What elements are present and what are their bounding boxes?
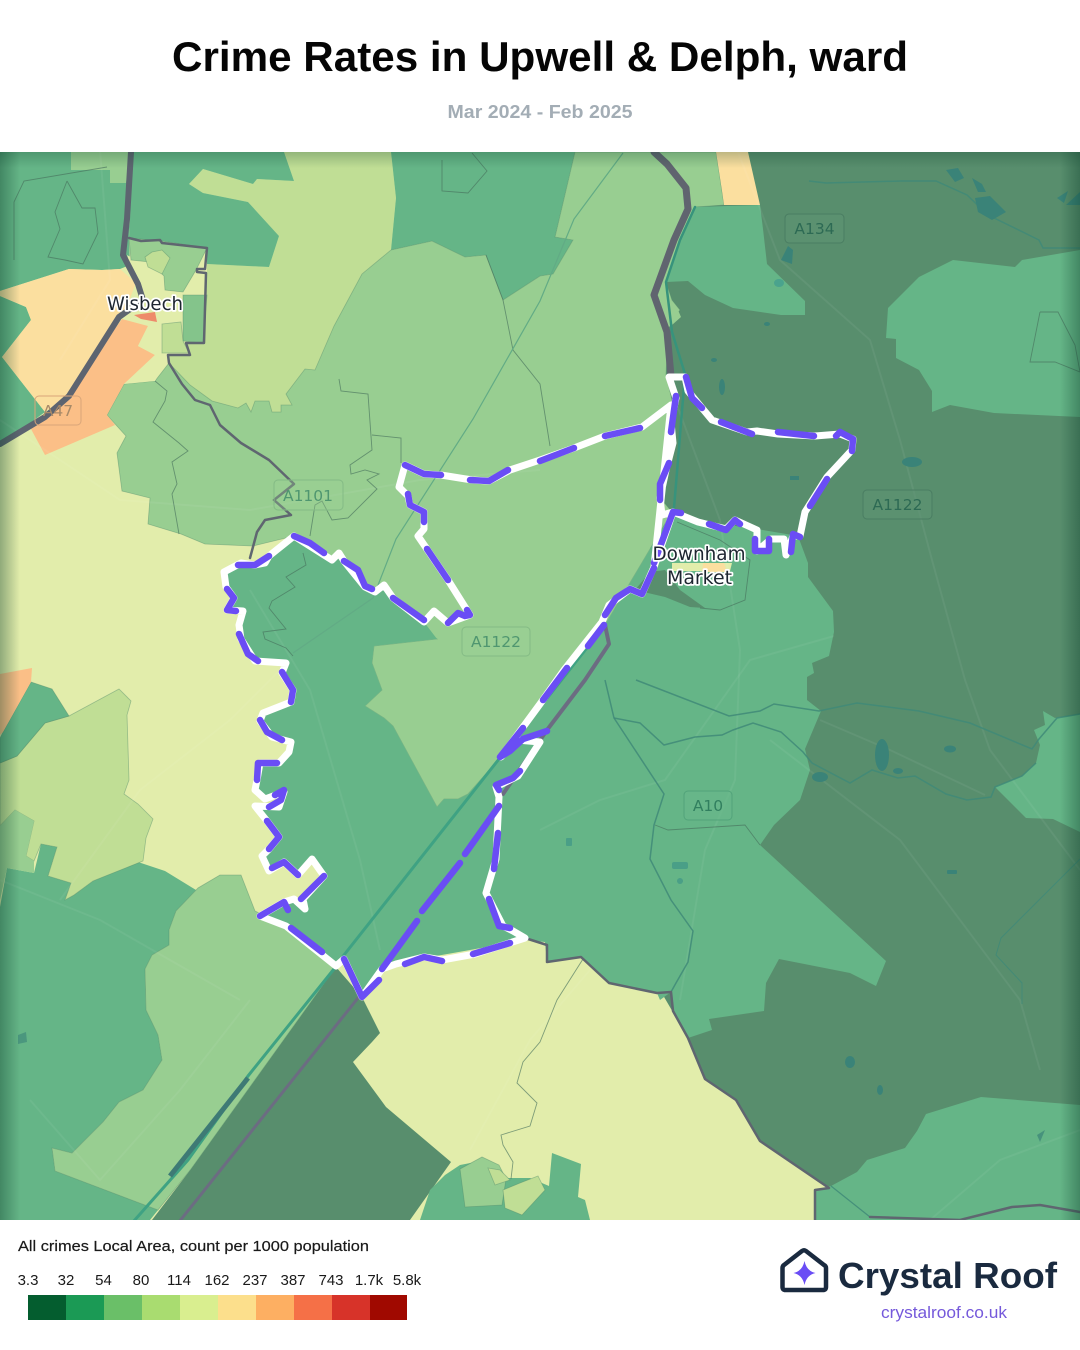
- legend scale values: [18, 1272, 422, 1289]
- website url: crystalroof.co.uk: [881, 1304, 1008, 1322]
- railway and main roads: [0, 152, 1080, 1222]
- road label: A1122 centre: A1122: [471, 633, 521, 651]
- road label: A134: A134: [794, 220, 835, 238]
- road label: A1101: [274, 480, 343, 510]
- road label: A1122 east: [863, 490, 932, 519]
- road label: A1122 east: A1122: [872, 496, 923, 514]
- map panel: [0, 150, 1080, 1222]
- legend scale values: 743: [318, 1272, 344, 1289]
- legend scale values: 80: [133, 1272, 149, 1289]
- road label: A47: A47: [43, 402, 73, 420]
- thin diagonal disused railway: [293, 153, 623, 653]
- district boundary Wisbech: [129, 238, 294, 558]
- place label: Wisbech: Wisbech: [107, 293, 183, 315]
- legend colour bar: [28, 1295, 407, 1320]
- place label: Downham Market: Market: [667, 567, 732, 589]
- icon: house with star: [782, 1250, 826, 1290]
- railway line: [179, 998, 358, 1222]
- road label: A1122 centre: [462, 627, 530, 656]
- logo: Crystal Roof: [782, 1250, 1058, 1322]
- map edge vignette: [0, 152, 1080, 1220]
- thin ward boundaries: [14, 153, 1080, 1179]
- legend scale values: 32: [58, 1272, 74, 1289]
- teal waterway along the railway: [133, 625, 605, 1222]
- legend scale values: 237: [242, 1272, 268, 1289]
- legend scale values: 3.3: [18, 1272, 38, 1289]
- legend scale values: 162: [204, 1272, 230, 1289]
- place label: Downham Market: Downham: [652, 543, 746, 565]
- legend scale values: 5.8k: [393, 1272, 422, 1289]
- logo wordmark: Crystal Roof: [838, 1255, 1058, 1296]
- legend scale values: 1.7k: [355, 1272, 384, 1289]
- legend: [18, 1238, 422, 1320]
- place label: Downham Market: [652, 543, 746, 589]
- legend scale values: 114: [167, 1272, 191, 1289]
- water: rivers and lakes: [605, 181, 1080, 1217]
- legend scale values: 54: [95, 1272, 112, 1289]
- legend title: All crimes Local Area, count per 1000 population: [18, 1238, 369, 1255]
- faint road network: [678, 208, 1066, 1070]
- ward boundary: Upwell and Delph: [224, 377, 853, 997]
- subtitle: date range: Mar 2024 - Feb 2025: [448, 101, 632, 122]
- district boundary north-east: [654, 152, 688, 376]
- district boundary south: [525, 938, 829, 1220]
- white outline: [224, 377, 853, 997]
- central green wards including the west of the Upwell and Delph ward: [224, 512, 886, 1038]
- road label: A134: [785, 214, 844, 243]
- road label: A10: [684, 791, 732, 820]
- title: Crime Rates in Upwell & Delph, ward: [172, 33, 908, 80]
- purple dashes: [227, 377, 853, 997]
- choropleth areas: [0, 152, 1080, 1220]
- road label: A47: [35, 396, 81, 425]
- road label: A10: A10: [693, 797, 723, 815]
- legend scale values: 387: [280, 1272, 306, 1289]
- road label: A1101: A1101: [283, 487, 333, 505]
- A47 road: [0, 152, 143, 444]
